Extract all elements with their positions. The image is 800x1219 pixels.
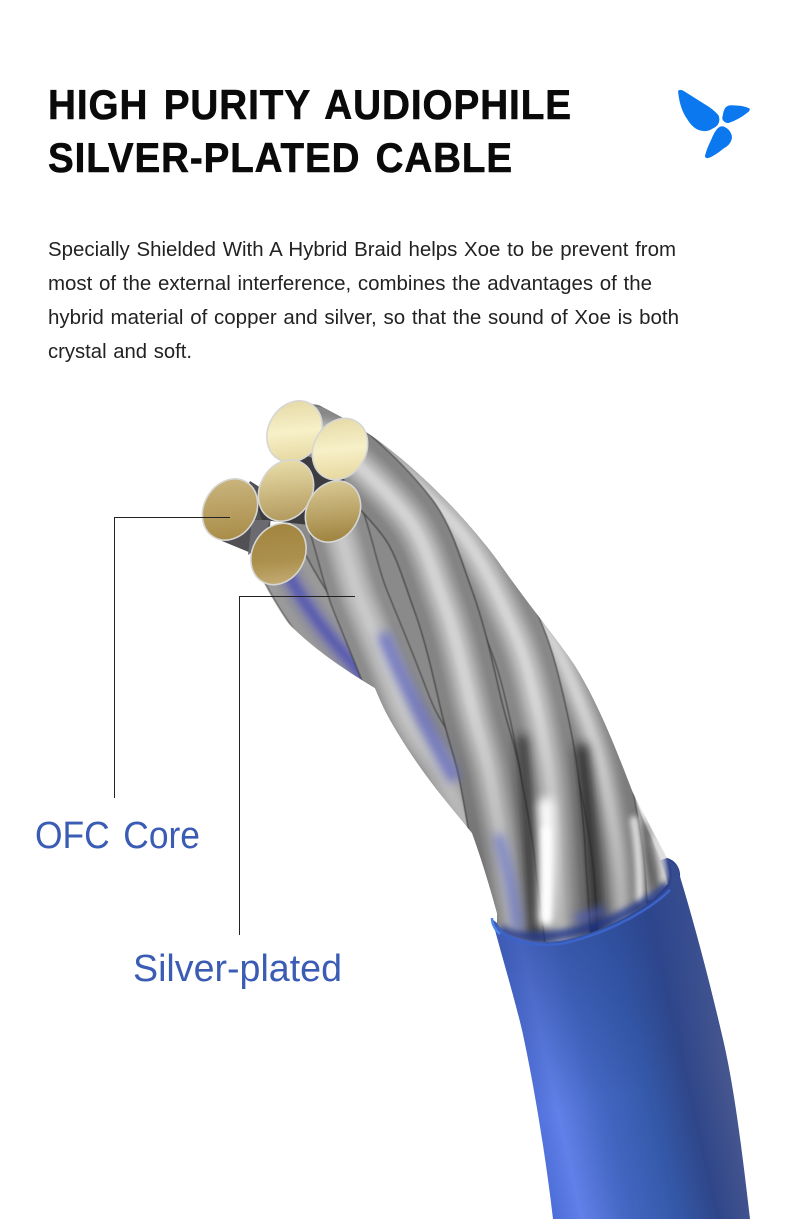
- description text block: [48, 239, 679, 363]
- strand base shadow at jacket: [500, 886, 668, 937]
- strand V: [333, 511, 480, 855]
- blue jacket: [492, 858, 750, 1219]
- silver strands: [278, 415, 700, 960]
- cable illustration: [191, 391, 750, 1219]
- label: OFC Core: OFC Core: [35, 815, 200, 857]
- leader line: OFC core: [114, 518, 230, 798]
- jacket lip: [497, 890, 670, 945]
- title: HIGH PURITY AUDIOPHILE: [48, 81, 572, 128]
- jacket interior: [497, 858, 680, 945]
- description text block: hybrid material of copper and silver, so that the sound of Xoe is both: [48, 307, 679, 329]
- lower darkening: [420, 751, 672, 942]
- gap at left core: [248, 520, 270, 555]
- dark gaps between cores: [255, 455, 345, 525]
- bright highlight: [546, 805, 547, 920]
- strand X: [294, 432, 563, 950]
- icon: blue three-blade logo: [679, 91, 749, 157]
- description text block: crystal and soft.: [48, 341, 192, 363]
- description text block: Specially Shielded With A Hybrid Braid helps Xoe to be prevent from: [48, 239, 676, 261]
- leader line: silver-plated: [240, 596, 355, 935]
- title: [48, 81, 572, 181]
- strand U: [278, 554, 392, 712]
- lower dark bands: [522, 740, 652, 935]
- left core back strand: [222, 481, 272, 560]
- OFC core ends: [191, 391, 379, 595]
- title: SILVER-PLATED CABLE: [48, 134, 513, 181]
- strand T: outer back wire: [320, 418, 648, 900]
- description text block: most of the external interference, combines the advantages of the: [48, 273, 652, 295]
- blue reflections: [383, 633, 605, 930]
- label: Silver-plated: Silver-plated: [133, 948, 342, 990]
- strand W: [340, 449, 515, 950]
- strand Y: [430, 480, 625, 950]
